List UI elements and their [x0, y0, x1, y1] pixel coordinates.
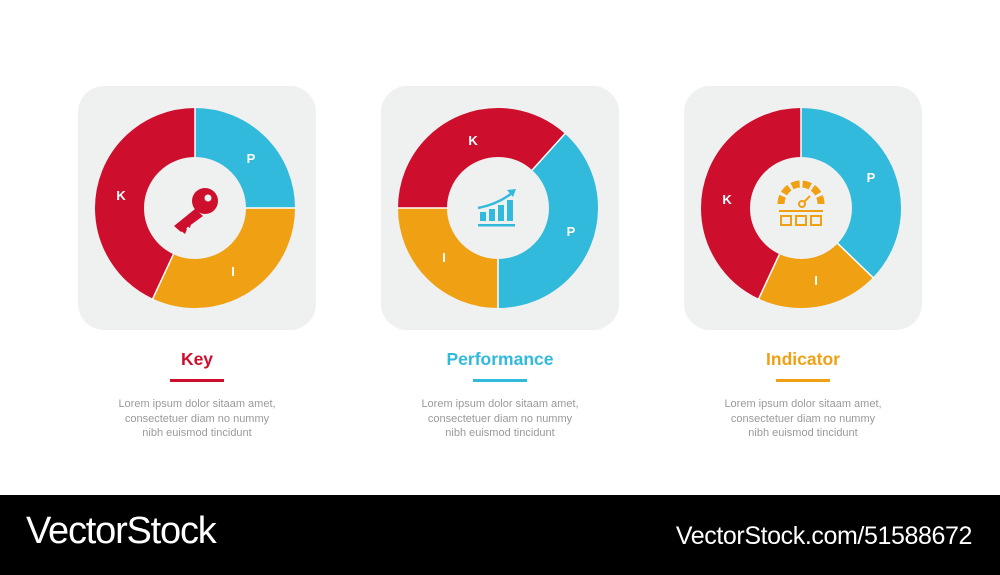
footer bar — [0, 495, 1000, 575]
donut: indicator: I — [814, 273, 818, 288]
underline: Indicator — [776, 379, 830, 382]
underline: Key — [170, 379, 224, 382]
heading: Indicator: Indicator — [766, 349, 840, 369]
text: Key: Lorem ipsum dolor sitaam amet, — [118, 398, 276, 410]
text: Performance: consectetuer diam no nummy — [428, 412, 572, 424]
text: Indicator: nibh euismod tincidunt — [748, 427, 858, 439]
text: Indicator: Lorem ipsum dolor sitaam amet, — [724, 398, 882, 410]
footer logo: VectorStock — [26, 510, 216, 552]
text: Indicator: consectetuer diam no nummy — [731, 412, 875, 424]
text: Key — [118, 398, 276, 439]
donut: key: P — [247, 151, 256, 166]
icon: growth chart — [478, 189, 516, 226]
icon: key — [174, 188, 218, 234]
underline: Performance — [473, 379, 527, 382]
heading: Performance: Performance — [446, 349, 554, 369]
donut: key — [116, 107, 296, 300]
text: Performance — [421, 398, 579, 439]
text: Performance: nibh euismod tincidunt — [445, 427, 555, 439]
donut: indicator: P — [867, 170, 876, 185]
donut: key: I — [231, 264, 235, 279]
donut: indicator — [722, 107, 876, 300]
icon: gauge — [779, 184, 823, 225]
text: Key: nibh euismod tincidunt — [142, 427, 252, 439]
donut: key: K — [116, 188, 126, 203]
donut: performance: I — [442, 250, 446, 265]
panel cards — [78, 86, 922, 330]
donut: performance: K — [468, 133, 478, 148]
heading: Key: Key — [181, 349, 213, 369]
donut: performance: P — [567, 224, 576, 239]
text: Key: consectetuer diam no nummy — [125, 412, 269, 424]
footer id: VectorStock.com/51588672 — [676, 522, 972, 550]
donut: performance — [397, 132, 576, 309]
text: Performance: Lorem ipsum dolor sitaam amet, — [421, 398, 579, 410]
text: Indicator — [724, 398, 882, 439]
donut: indicator: K — [722, 192, 732, 207]
